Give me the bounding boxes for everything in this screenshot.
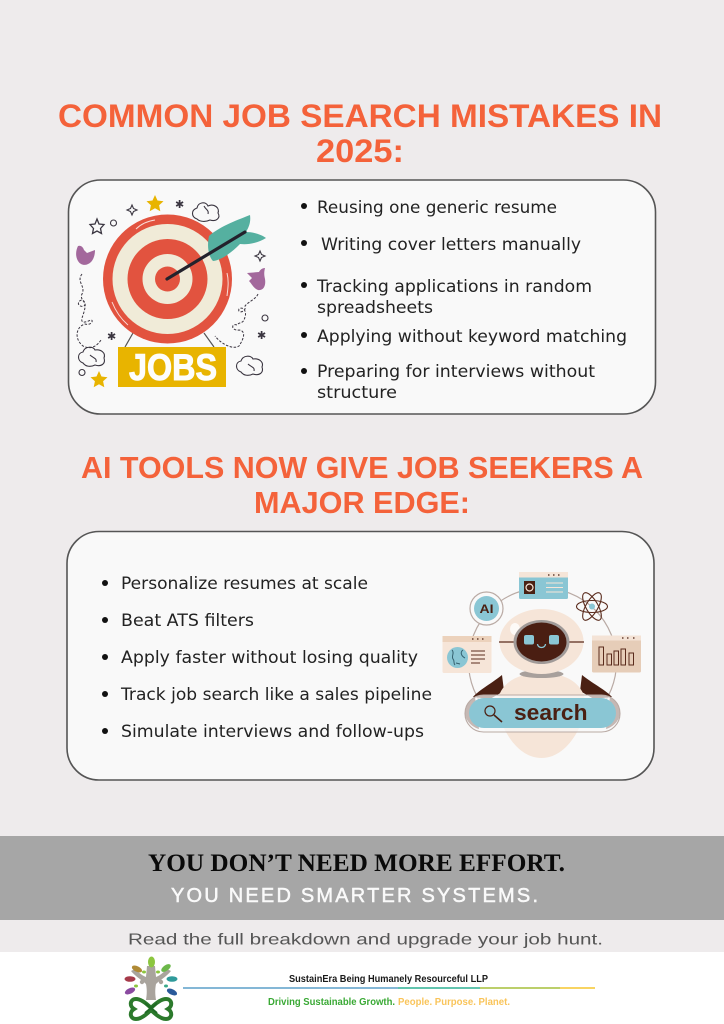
icon: bar chart window [592, 636, 641, 672]
banner: smarter systems message: YOU DON’T NEED MORE EFFORT. [148, 850, 565, 877]
tagline: People. Purpose. Planet. [398, 997, 510, 1008]
icon: atom [576, 590, 608, 623]
robot arms [473, 675, 612, 699]
list: ai benefits: Personalize resumes at scale [121, 574, 368, 594]
panel: ai tools benefits [67, 532, 654, 780]
banner: smarter systems message: YOU NEED SMARTER SYSTEMS. [171, 885, 538, 907]
company name: SustainEra Being Humanely Resourceful LLP [289, 974, 488, 985]
list: mistakes: Preparing for interviews without [317, 362, 595, 382]
tagline: Driving Sustainable Growth. [268, 997, 395, 1008]
colored divider [183, 987, 595, 989]
list: mistakes: Tracking applications in random [316, 277, 592, 297]
footer [0, 952, 724, 1024]
icon: target with arrow and jobs sign: ✱ [257, 330, 266, 342]
icon: target with arrow and jobs sign [76, 195, 268, 388]
logo: tree and monogram [124, 956, 178, 1019]
title: common job search mistakes [58, 98, 662, 169]
search bar [465, 695, 620, 732]
search bar: search [514, 700, 588, 725]
icon: target with arrow and jobs sign: ✱ [175, 199, 184, 211]
tagline [268, 997, 510, 1008]
list: mistakes [301, 198, 627, 403]
heading: ai tools edge [81, 450, 643, 520]
heading: ai tools edge: MAJOR EDGE: [254, 485, 470, 520]
list: ai benefits [102, 574, 432, 742]
list: mistakes: Reusing one generic resume [317, 198, 557, 218]
icon: globe window [442, 636, 492, 673]
icon: ai robot with search bar [442, 572, 641, 758]
icon: target with arrow and jobs sign: ✱ [107, 331, 116, 343]
banner: smarter systems message [0, 836, 724, 920]
heading: ai tools edge: AI TOOLS NOW GIVE JOB SEEKERS A [81, 450, 643, 485]
panel: job search mistakes [68, 180, 656, 414]
title: common job search mistakes: COMMON JOB SEARCH MISTAKES IN [58, 98, 662, 134]
icon: ai badge: AI [480, 602, 494, 616]
list: mistakes: structure [317, 383, 397, 403]
call to action text: Read the full breakdown and upgrade your job hunt. [128, 932, 603, 948]
icon: ai badge [470, 592, 503, 625]
title: common job search mistakes: 2025: [316, 133, 404, 169]
icon: target with arrow and jobs sign: JOBS [129, 347, 217, 388]
list: ai benefits: Beat ATS filters [121, 611, 254, 631]
list: mistakes: Applying without keyword matching [317, 327, 627, 347]
icon: top window [519, 572, 568, 599]
list: mistakes: spreadsheets [317, 298, 433, 318]
list: mistakes: Writing cover letters manually [321, 235, 581, 255]
list: ai benefits: Simulate interviews and follow-ups [121, 722, 424, 742]
list: ai benefits: Apply faster without losing quality [121, 648, 418, 668]
list: ai benefits: Track job search like a sales pipeline [120, 685, 432, 705]
